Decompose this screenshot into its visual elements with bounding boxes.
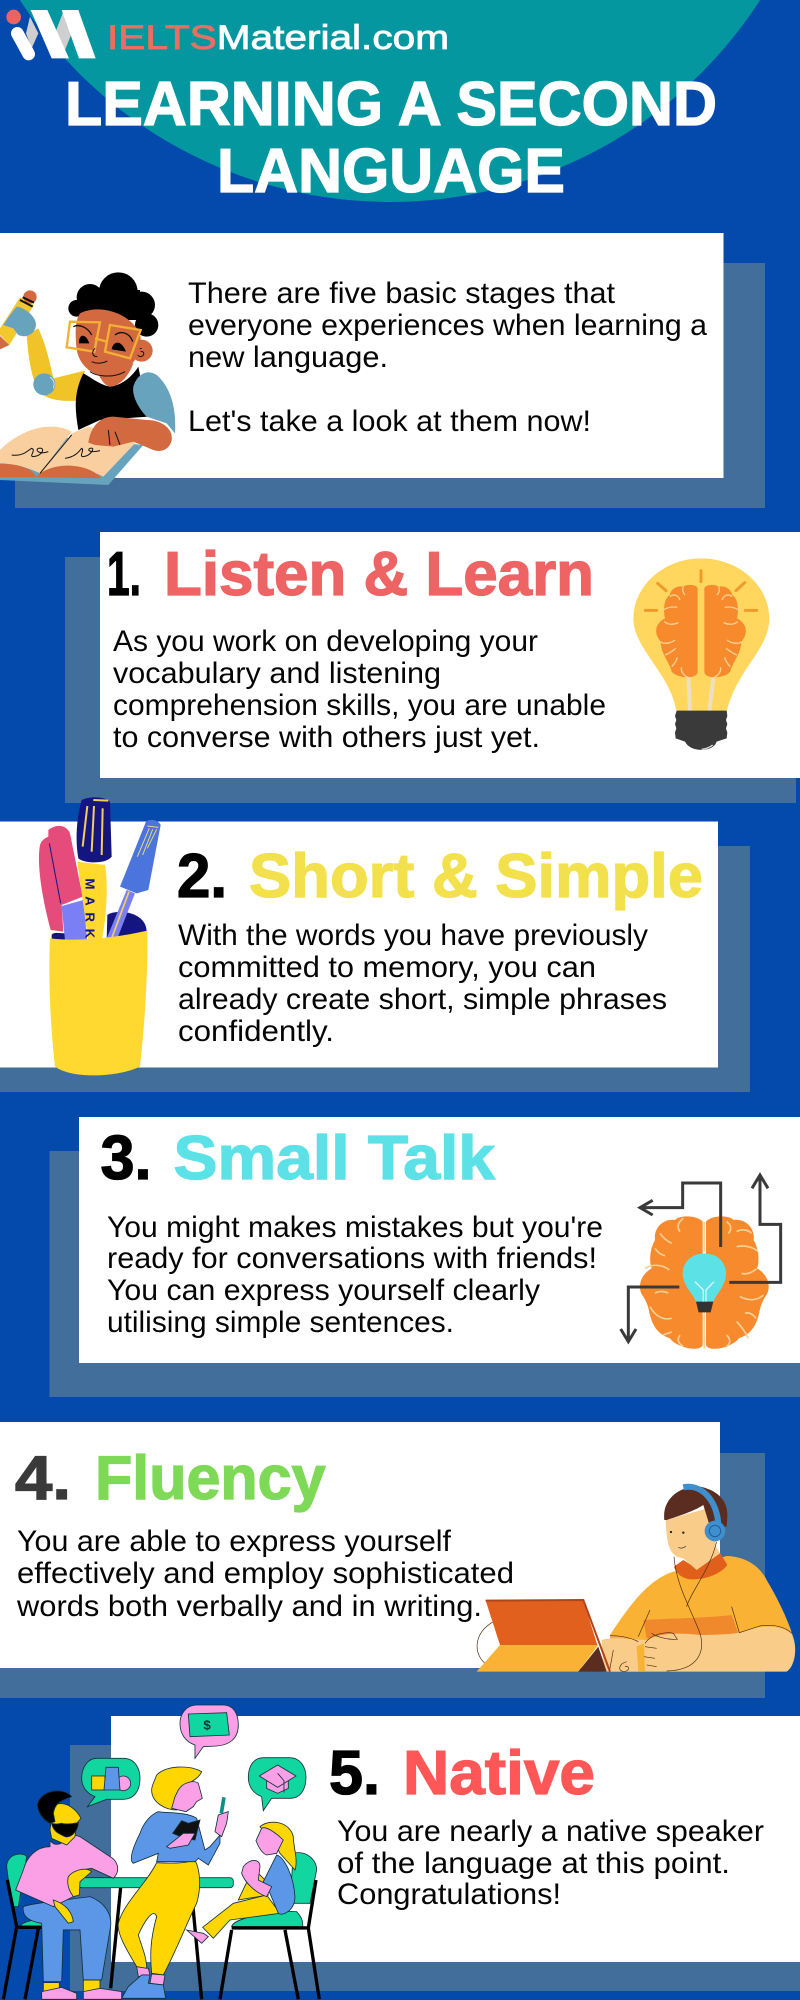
man: [16, 1791, 122, 1999]
stage 3 text: ready for conversations with friends!: [107, 1242, 597, 1275]
speech bubble: money: [180, 1705, 238, 1758]
woman: [118, 1767, 228, 1998]
icon: cup with pens: [39, 797, 161, 1075]
stage 3 text: You can express yourself clearly: [107, 1274, 540, 1307]
stage 5 text: of the language at this point.: [337, 1847, 730, 1880]
title: LEARNING A SECOND: [65, 70, 717, 139]
panel: stage 1 Listen and Learn: [65, 532, 800, 803]
intro text: [188, 277, 707, 438]
stage 3 text: [107, 1211, 603, 1339]
icon: logo mark: [6, 10, 96, 58]
heading: stage 1: Listen & Learn: [164, 540, 594, 609]
stage 4 text: [16, 1525, 514, 1623]
stage 4 text: You are able to express yourself: [17, 1525, 452, 1558]
heading: stage 4: Fluency: [95, 1444, 326, 1513]
panel: stage 4 Fluency: [0, 1422, 795, 1698]
heading: stage 4: 4.: [15, 1444, 71, 1513]
speech bubble: objects: [82, 1758, 140, 1807]
pen label: MARK: [82, 878, 97, 939]
icon: three people talking at a table: [3, 1705, 319, 1999]
heading: stage 3: 3.: [100, 1124, 152, 1193]
stage 5 text: You are nearly a native speaker: [337, 1815, 764, 1848]
speech bubble: money: $: [203, 1717, 211, 1732]
heading: stage 3: Small Talk: [174, 1124, 496, 1193]
stage 3 text: You might makes mistakes but you're: [107, 1211, 603, 1244]
heading: stage 5: Native: [403, 1739, 595, 1808]
stage 2 text: already create short, simple phrases: [178, 983, 667, 1016]
stage 1 text: As you work on developing your: [113, 625, 538, 658]
panel: stage 3 Small Talk: [50, 1117, 800, 1397]
girl: [187, 1822, 296, 1943]
heading: stage 1: 1.: [107, 540, 141, 609]
stage 5 text: [337, 1815, 764, 1911]
heading: stage 2: Short & Simple: [249, 842, 703, 911]
stage 2 text: [178, 919, 667, 1048]
heading: stage 5: [329, 1739, 595, 1808]
stage 5 text: Congratulations!: [337, 1878, 561, 1911]
stage 2 text: With the words you have previously: [178, 919, 648, 952]
stage 4 text: words both verbally and in writing.: [16, 1590, 482, 1623]
stage 2 text: confidently.: [178, 1015, 334, 1048]
intro text: There are five basic stages that: [188, 277, 616, 310]
stage 1 text: vocabulary and listening: [113, 657, 441, 690]
stage 1 text: comprehension skills, you are unable: [113, 689, 606, 722]
logo wordmark: IELTS Material.com: [107, 19, 449, 57]
panel: stage 2 Short and Simple: [0, 797, 750, 1092]
panel: introduction: [0, 233, 765, 508]
teal background circle: [0, 0, 800, 202]
heading: stage 2: 2.: [177, 842, 227, 911]
intro text: Let's take a look at them now!: [188, 405, 591, 438]
icon: student reading with pencil: [0, 272, 175, 485]
title: LANGUAGE: [217, 137, 565, 206]
heading: stage 5: 5.: [329, 1739, 380, 1808]
stage 3 text: utilising simple sentences.: [107, 1306, 454, 1339]
logo: [6, 10, 449, 58]
chairs and table: [3, 1853, 319, 1999]
icon: lightbulb with brain: [633, 558, 769, 750]
stage 1 text: [113, 625, 606, 754]
speech bubble: graduation cap: [248, 1758, 306, 1811]
stage 1 text: to converse with others just yet.: [113, 721, 540, 754]
title: [65, 70, 717, 206]
panel: stage 5 Native: [3, 1705, 800, 1999]
stage 4 text: effectively and employ sophisticated: [17, 1557, 514, 1590]
intro text: everyone experiences when learning a: [188, 309, 707, 342]
intro text: new language.: [188, 341, 388, 374]
stage 2 text: committed to memory, you can: [178, 951, 596, 984]
icon: man with headphones at laptop: [477, 1487, 795, 1672]
icon: brain with lightbulb and arrows: [621, 1175, 781, 1349]
